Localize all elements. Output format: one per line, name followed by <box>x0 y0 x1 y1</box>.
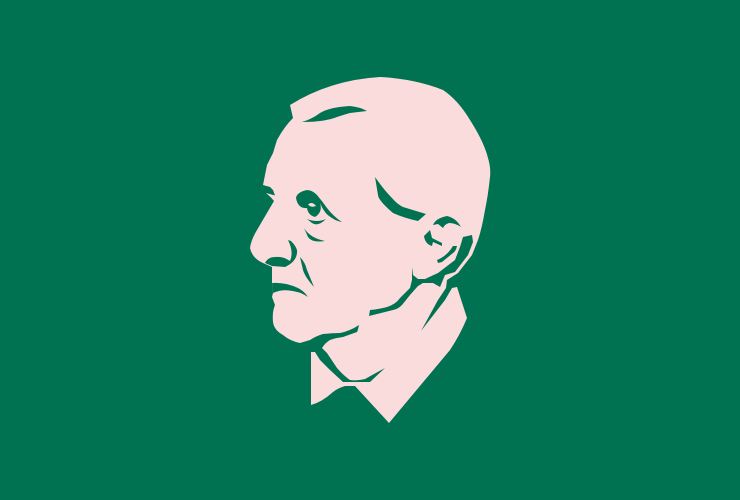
illustration: head profile with features <box>250 77 490 423</box>
under-eye wrinkle <box>307 219 326 224</box>
eyebrow on forehead <box>302 106 367 122</box>
neck band <box>300 325 385 382</box>
lower eye wrinkle <box>304 228 325 242</box>
nose and nostril <box>265 240 297 267</box>
ear-side crease <box>375 177 426 221</box>
cheek line <box>300 257 314 287</box>
ear lower crescent <box>437 246 457 263</box>
ear top crescent <box>433 216 461 228</box>
ear helix and jaw line <box>369 235 473 316</box>
head and collar silhouette <box>250 77 490 423</box>
mouth <box>272 283 308 297</box>
eye <box>296 190 342 222</box>
ear tragus <box>424 230 442 246</box>
